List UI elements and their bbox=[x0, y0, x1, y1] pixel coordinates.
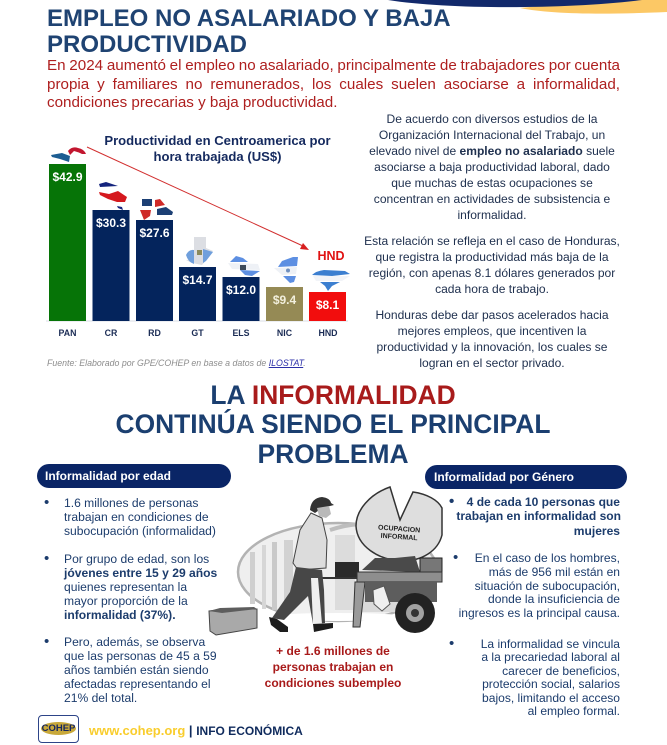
bullet: hombres bbox=[453, 549, 620, 620]
country labels: HND bbox=[318, 328, 338, 338]
flag map: Honduras bbox=[312, 270, 350, 291]
box on ground bbox=[209, 607, 257, 635]
arrow bbox=[87, 147, 309, 250]
chart graphic bbox=[46, 146, 350, 338]
paragraph: pasos acelerados: productividad y la innovación, los cuales se bbox=[376, 340, 608, 354]
bullet: hombres: • bbox=[453, 549, 458, 566]
left bullet list bbox=[44, 494, 217, 705]
cart wheel bbox=[395, 593, 435, 633]
section heading: informalidad: CONTINÚA SIENDO EL PRINCIPAL bbox=[116, 409, 550, 439]
bullet: hombres: situación de subocupación, bbox=[475, 578, 620, 592]
bullet: 1.6 millones: 1.6 millones de personas bbox=[64, 496, 198, 510]
country labels: RD bbox=[148, 328, 161, 338]
paragraph: estudios OIT: concentran en actividades de subsistencia e bbox=[374, 192, 610, 206]
value labels: $14.7 bbox=[182, 273, 213, 287]
paragraph: caso Honduras: cada hora de trabajo. bbox=[435, 282, 549, 296]
paragraph: estudios OIT: De acuerdo con diversos estudios de la bbox=[387, 112, 597, 126]
illustration: vendedor informal bbox=[208, 486, 443, 636]
bullet: 1.6 millones: subocupación (informalidad) bbox=[64, 524, 216, 538]
bar chart: productividad bbox=[46, 133, 350, 368]
title: EMPLEO NO ASALARIADO Y BAJA bbox=[47, 5, 451, 32]
paragraph: caso Honduras: Esta relación se refleja en el caso de Honduras, bbox=[364, 234, 620, 248]
paragraph: pasos acelerados bbox=[375, 308, 609, 370]
flag map: Panama bbox=[51, 147, 86, 162]
bullet: precariedad: protección social, salarios bbox=[482, 677, 620, 691]
title bbox=[47, 5, 451, 58]
intro text: En 2024 aumentó el empleo no asalariado, principalmente de trabajadores por cuenta bbox=[47, 57, 620, 74]
bullet: precariedad: carecer de beneficios, bbox=[502, 664, 620, 678]
paragraph: estudios OIT: Organización Internacional del Trabajo, un bbox=[379, 128, 605, 142]
cheese wheel sign: OCUPACION bbox=[378, 525, 420, 534]
bullet: 4 de cada 10: 4 de cada 10 personas que bbox=[467, 495, 620, 509]
intro text: propia y familiares no remunerados, los cuales suelen asociarse a informalidad, bbox=[47, 76, 620, 93]
cart bbox=[313, 556, 442, 627]
bullet: hombres: En el caso de los hombres, bbox=[475, 551, 620, 565]
pill: informalidad por genero: Informalidad por Género bbox=[434, 470, 574, 484]
bullet: jovenes bbox=[44, 550, 217, 622]
intro text bbox=[47, 57, 620, 111]
bullet: hombres: donde la insuficiencia de bbox=[488, 592, 620, 606]
country labels: CR bbox=[105, 328, 118, 338]
flag map: El Salvador bbox=[228, 256, 260, 276]
paragraph: estudios OIT: que muchas de estas ocupaciones se bbox=[391, 176, 593, 190]
bullet: hombres: ingresos es la principal causa. bbox=[459, 606, 620, 620]
bullet: 4 de cada 10: • bbox=[449, 493, 454, 510]
country labels: PAN bbox=[59, 328, 76, 338]
bullet: hombres: más de 956 mil están en bbox=[489, 565, 620, 579]
right text column bbox=[364, 112, 620, 370]
bullet: precariedad bbox=[449, 635, 620, 718]
value labels: $30.3 bbox=[96, 216, 126, 230]
section heading: informalidad bbox=[116, 380, 550, 469]
footer bbox=[38, 715, 303, 743]
value labels: $12.0 bbox=[226, 283, 256, 297]
bullet: 45 a 59: Pero, además, se observa bbox=[64, 635, 205, 649]
bullet: precariedad: al empleo formal. bbox=[528, 704, 620, 718]
bars bbox=[49, 164, 346, 321]
bullet: precariedad: La informalidad se vincula bbox=[481, 637, 620, 651]
bullet: 1.6 millones: • bbox=[44, 494, 49, 511]
bullet: precariedad: bajos, limitando el acceso bbox=[482, 691, 620, 705]
value labels bbox=[52, 170, 340, 312]
footer text: www.cohep.org | INFO ECONÓMICA bbox=[89, 723, 303, 738]
bullet: 45 a 59: que las personas de 45 a 59 bbox=[64, 649, 217, 663]
country labels: NIC bbox=[277, 328, 293, 338]
paragraph: caso Honduras bbox=[364, 234, 620, 296]
bullet: precariedad: a la precariedad laboral al bbox=[481, 650, 620, 664]
bullet: 45 a 59: 21% del total. bbox=[64, 691, 137, 705]
bullet: jovenes: quienes representan la bbox=[64, 580, 187, 594]
bullet: 4 de cada 10 bbox=[449, 493, 621, 538]
bullet: precariedad: • bbox=[449, 635, 454, 652]
pill: informalidad por genero bbox=[425, 465, 627, 489]
paragraph: estudios OIT bbox=[369, 112, 615, 222]
source note: Fuente: Elaborado por GPE/COHEP en base a datos de ILOSTAT. bbox=[47, 358, 306, 368]
paragraph: pasos acelerados: mejores empleos, que incentiven la bbox=[398, 324, 586, 338]
flag map: Guatemala bbox=[186, 237, 213, 265]
bullet: jovenes: mayor proporción de la bbox=[64, 594, 188, 608]
section heading: informalidad: PROBLEMA bbox=[257, 439, 409, 469]
background ellipse bbox=[238, 523, 438, 621]
flag map: Costa Rica bbox=[99, 182, 127, 210]
pill: informalidad por edad bbox=[37, 464, 231, 488]
pill: informalidad por edad: Informalidad por edad bbox=[45, 469, 171, 483]
value labels: $8.1 bbox=[316, 298, 340, 312]
section heading: informalidad: LA INFORMALIDAD bbox=[210, 380, 456, 410]
bullet: jovenes: • bbox=[44, 550, 49, 567]
value labels: $9.4 bbox=[273, 293, 297, 307]
intro text: condiciones precarias y baja productividad. bbox=[47, 94, 337, 111]
bullet: 1.6 millones: trabajan en condiciones de bbox=[64, 510, 209, 524]
bullet: 45 a 59: años también están siendo bbox=[64, 663, 209, 677]
country labels: GT bbox=[191, 328, 204, 338]
cheese wheel sign: INFORMAL bbox=[380, 533, 418, 542]
bullet: jovenes: jóvenes entre 15 y 29 años bbox=[64, 566, 217, 580]
bullet: 4 de cada 10: mujeres bbox=[574, 524, 620, 538]
cheese wheel sign bbox=[356, 487, 442, 561]
bullet: 1.6 millones bbox=[44, 494, 216, 538]
country labels bbox=[59, 328, 338, 338]
paragraph: pasos acelerados: logran en el sector privado. bbox=[419, 356, 565, 370]
bullet: jovenes: Por grupo de edad, son los bbox=[64, 552, 209, 566]
callout: subempleo: + de 1.6 millones de bbox=[276, 644, 390, 658]
chart title: Productividad en Centroamerica por bbox=[104, 133, 331, 148]
vendor figure bbox=[269, 497, 334, 632]
paragraph: estudios OIT: asociarse a baja productividad laboral, dado bbox=[374, 160, 610, 174]
chart title: hora trabajada (US$) bbox=[153, 149, 282, 164]
value labels: $27.6 bbox=[139, 226, 170, 240]
value labels: $42.9 bbox=[52, 170, 83, 184]
bullet: 45 a 59: • bbox=[44, 633, 49, 650]
title: PRODUCTIVIDAD bbox=[47, 31, 247, 58]
flag map: Dominican Republic bbox=[140, 199, 173, 220]
paragraph: caso Honduras: región, con apenas 8.1 dólares generados por bbox=[369, 266, 615, 280]
top decorative banner bbox=[388, 0, 667, 14]
bullet: 4 de cada 10: trabajan en informalidad son bbox=[456, 509, 621, 523]
HND highlight label: HND bbox=[317, 249, 345, 263]
paragraph: pasos acelerados: Honduras debe dar pasos acelerados hacia bbox=[375, 308, 609, 322]
callout: subempleo bbox=[265, 644, 401, 690]
right bullet list bbox=[449, 493, 621, 718]
chart title bbox=[104, 133, 331, 164]
paragraph: estudios OIT: informalidad. bbox=[458, 208, 526, 222]
flag map: Nicaragua bbox=[274, 257, 298, 283]
bullet: jovenes: informalidad (37%). bbox=[64, 608, 176, 622]
logo: COHEP bbox=[38, 715, 79, 743]
callout: subempleo: condiciones subempleo bbox=[265, 676, 401, 690]
country labels: ELS bbox=[232, 328, 250, 338]
bullet: 45 a 59: afectadas representando el bbox=[64, 677, 211, 691]
paragraph: caso Honduras: que registra la productividad más baja de la bbox=[375, 250, 609, 264]
logo: COHEP: COHEP bbox=[42, 723, 75, 734]
paragraph: estudios OIT: elevado nivel de empleo no asalariado suele bbox=[369, 144, 615, 158]
callout: subempleo: personas trabajan en bbox=[273, 660, 393, 674]
bullet: 45 a 59 bbox=[44, 633, 217, 705]
